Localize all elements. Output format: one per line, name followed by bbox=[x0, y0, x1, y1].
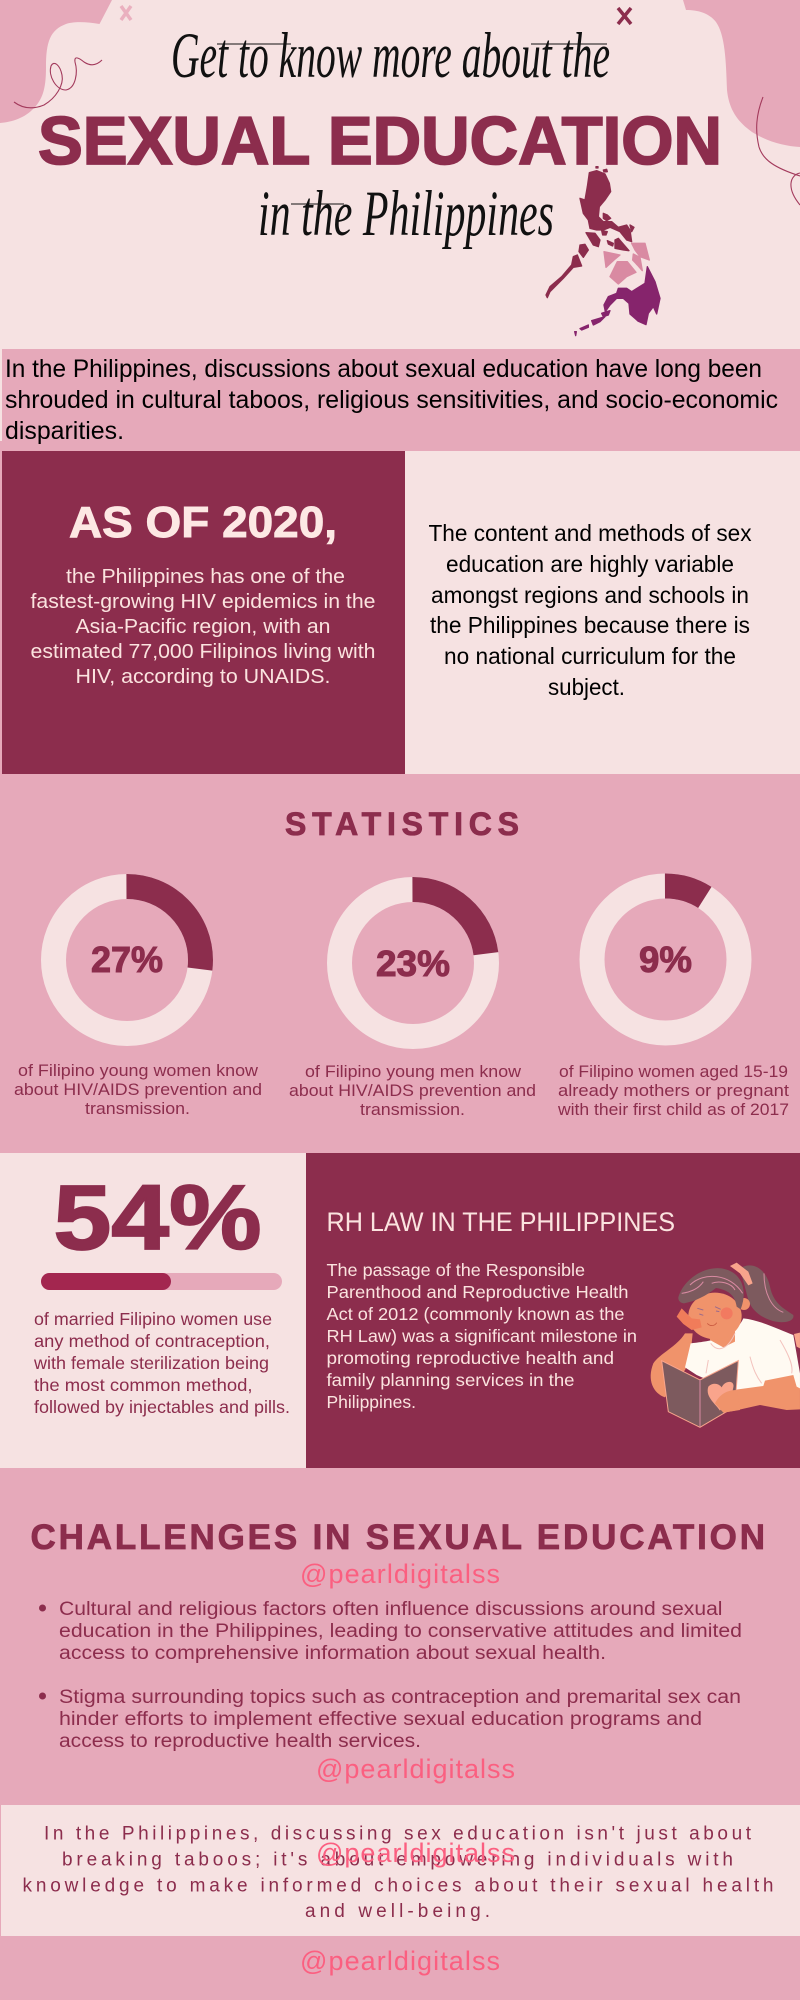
title: main heading: SEXUAL EDUCATION bbox=[38, 103, 722, 179]
donut: 27%: 27% bbox=[91, 939, 163, 980]
watermark: over closing panel: @pearldigitalss bbox=[316, 1838, 515, 1868]
curl: right bbox=[757, 97, 800, 205]
bullet two bbox=[39, 1687, 741, 1752]
HIV paragraph bbox=[30, 565, 376, 688]
contraception paragraph: followed by injectables and pills. bbox=[34, 1397, 290, 1417]
curriculum paragraph: the Philippines because there is bbox=[430, 612, 750, 638]
RH law paragraph: family planning services in the bbox=[326, 1370, 574, 1390]
RH law paragraph: Parenthood and Reproductive Health bbox=[326, 1282, 628, 1302]
RH law paragraph: Act of 2012 (commonly known as the bbox=[326, 1304, 624, 1324]
contraception paragraph: any method of contraception, bbox=[34, 1331, 270, 1351]
heading: statistics: STATISTICS bbox=[285, 806, 519, 842]
caption: young women: of Filipino young women know bbox=[18, 1061, 259, 1080]
closing text bbox=[22, 1824, 774, 1922]
watermark: under challenges heading: @pearldigitalss bbox=[300, 1559, 500, 1589]
title: script line one: Get to know more about the bbox=[171, 21, 610, 92]
bullet one: education in the Philippines, leading to conservative attitudes and limited bbox=[59, 1621, 742, 1642]
HIV paragraph: Asia-Pacific region, with an bbox=[76, 615, 330, 638]
heading: challenges: CHALLENGES IN SEXUAL EDUCATION bbox=[30, 1518, 765, 1557]
intro text: shrouded in cultural taboos, religious sensitivities, and socio-economic bbox=[5, 386, 778, 414]
panel: as of 2020 bbox=[2, 451, 405, 774]
title: script line two: in the Philippines bbox=[258, 179, 554, 250]
intro text bbox=[5, 355, 778, 445]
curriculum paragraph: subject. bbox=[548, 674, 625, 700]
RH law paragraph: RH Law) was a significant milestone in bbox=[326, 1326, 637, 1346]
decorative blob: top right bbox=[683, 0, 800, 147]
RH law paragraph: promoting reproductive health and bbox=[326, 1348, 614, 1368]
caption: young women: about HIV/AIDS prevention and bbox=[14, 1080, 262, 1099]
intro text: disparities. bbox=[5, 417, 124, 445]
caption: young women: transmission. bbox=[85, 1099, 190, 1118]
RH law paragraph bbox=[326, 1260, 637, 1412]
contraception paragraph: with female sterilization being bbox=[33, 1353, 269, 1373]
curriculum paragraph: education are highly variable bbox=[446, 551, 734, 577]
caption: young men: transmission. bbox=[360, 1100, 465, 1119]
panel: statistics bbox=[14, 806, 789, 1119]
curriculum paragraph: no national curriculum for the bbox=[444, 643, 736, 669]
watermark: footer: @pearldigitalss bbox=[300, 1946, 500, 1976]
intro text: In the Philippines, discussions about sexual education have long been bbox=[5, 355, 762, 383]
panel: curriculum note bbox=[405, 451, 800, 774]
RH law paragraph: Philippines. bbox=[326, 1392, 416, 1412]
bullet two: access to reproductive health services. bbox=[59, 1731, 421, 1752]
contraception paragraph bbox=[33, 1309, 290, 1417]
watermark: above closing panel: @pearldigitalss bbox=[316, 1754, 515, 1784]
heading: RH law: RH LAW IN THE PHILIPPINES bbox=[326, 1207, 675, 1237]
panel: RH law bbox=[306, 1153, 800, 1468]
decorative blob: top left bbox=[0, 0, 112, 123]
caption: young men: of Filipino young men know bbox=[305, 1062, 522, 1081]
caption: young men bbox=[289, 1062, 536, 1119]
RH law paragraph: The passage of the Responsible bbox=[326, 1260, 585, 1280]
illustration: girl reading a book bbox=[651, 1263, 800, 1427]
caption: young women bbox=[14, 1061, 262, 1118]
bullet one: Cultural and religious factors often influence discussions around sexual bbox=[59, 1599, 722, 1620]
icon: Philippines map bbox=[546, 167, 660, 336]
panel: closing statement bbox=[1, 1805, 800, 1936]
curl: top left bbox=[14, 58, 102, 108]
panel: challenges bbox=[30, 1518, 765, 1752]
curriculum paragraph: The content and methods of sex bbox=[428, 520, 752, 546]
donut: 23%: 23% bbox=[376, 943, 450, 984]
caption: mothers aged 15-19: of Filipino women aged 15-19 bbox=[559, 1062, 788, 1081]
caption: mothers aged 15-19: with their first child as of 2017 bbox=[557, 1100, 789, 1119]
HIV paragraph: estimated 77,000 Filipinos living with bbox=[30, 640, 376, 663]
bullet two: Stigma surrounding topics such as contraception and premarital sex can bbox=[59, 1687, 741, 1708]
donut: 23% bbox=[340, 890, 486, 1036]
sparkle: maroon cross bbox=[618, 8, 631, 24]
donut: 9% bbox=[592, 886, 739, 1033]
panel: hero header bbox=[0, 0, 800, 441]
progress bar bbox=[41, 1273, 282, 1290]
closing text: and well-being. bbox=[305, 1901, 490, 1922]
curriculum paragraph bbox=[428, 520, 752, 700]
caption: mothers aged 15-19: already mothers or pregnant bbox=[558, 1081, 789, 1100]
sparkle: pink cross bbox=[121, 6, 131, 20]
bullet one bbox=[39, 1599, 742, 1664]
closing text: breaking taboos; it's about empowering individuals with bbox=[62, 1850, 733, 1870]
HIV paragraph: the Philippines has one of the bbox=[66, 565, 345, 588]
caption: mothers aged 15-19 bbox=[557, 1062, 789, 1119]
panel: contraception 54% bbox=[0, 1153, 306, 1468]
heading: as of 2020: AS OF 2020, bbox=[69, 498, 337, 547]
big number: 54%: 54% bbox=[54, 1167, 262, 1269]
HIV paragraph: HIV, according to UNAIDS. bbox=[76, 665, 330, 688]
closing text: In the Philippines, discussing sex education isn't just about bbox=[44, 1824, 752, 1844]
contraception paragraph: the most common method, bbox=[34, 1375, 252, 1395]
donut: 9%: 9% bbox=[639, 939, 692, 980]
HIV paragraph: fastest-growing HIV epidemics in the bbox=[30, 590, 376, 613]
caption: young men: about HIV/AIDS prevention and bbox=[289, 1081, 536, 1100]
bullet two: hinder efforts to implement effective sexual education programs and bbox=[59, 1709, 702, 1730]
bullet one: access to comprehensive information about sexual health. bbox=[59, 1643, 606, 1664]
closing text: knowledge to make informed choices about their sexual health bbox=[22, 1876, 774, 1896]
contraception paragraph: of married Filipino women use bbox=[34, 1309, 272, 1329]
curriculum paragraph: amongst regions and schools in bbox=[431, 582, 749, 608]
panel: intro strip bbox=[2, 349, 800, 451]
donut: 27% bbox=[54, 886, 200, 1034]
